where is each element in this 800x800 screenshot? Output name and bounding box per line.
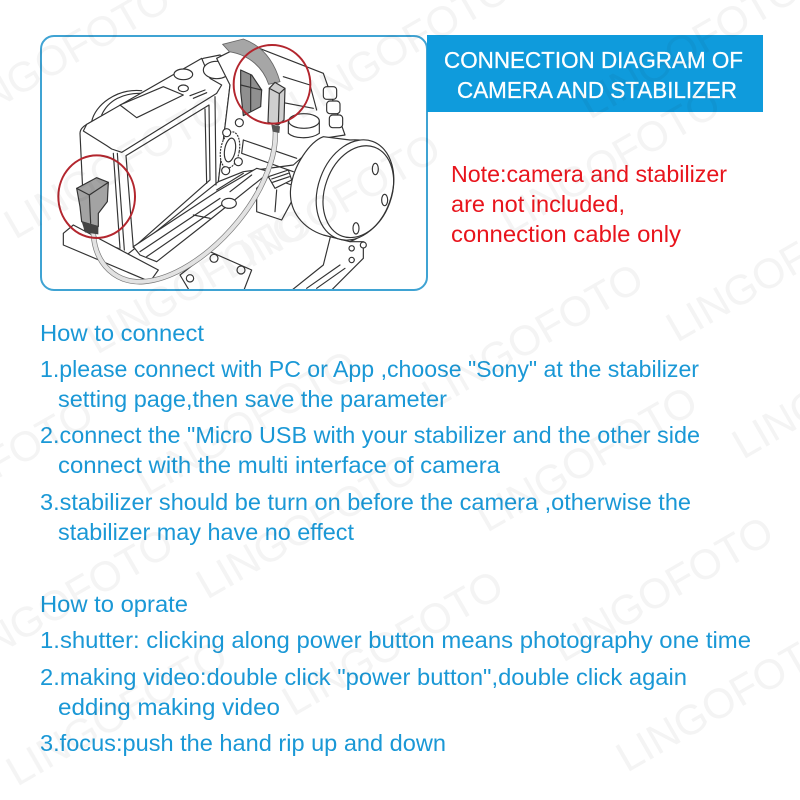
section: how to operate: 2.making video:double click "power button",double click again	[40, 664, 687, 690]
gimbal frame	[217, 43, 345, 182]
section: how to connect: 1.please connect with PC or App ,choose "Sony" at the stabilizer	[40, 356, 699, 382]
section: how to connect: How to connect	[40, 320, 205, 346]
note text: Note:camera and stabilizer	[451, 161, 727, 187]
watermark: LINGOFOTO repeated: LINGOFOTO	[128, 341, 365, 505]
watermark: LINGOFOTO repeated: LINGOFOTO	[544, 507, 781, 671]
watermark: LINGOFOTO repeated: LINGOFOTO	[0, 84, 233, 248]
watermark: LINGOFOTO repeated: LINGOFOTO	[414, 254, 651, 418]
illustration: line art of camera on stabilizer	[58, 39, 407, 292]
section: how to operate: How to oprate	[40, 591, 188, 617]
section: how to connect: setting page,then save the parameter	[58, 386, 447, 412]
grey strap	[223, 39, 280, 84]
note text: connection cable only	[451, 221, 682, 247]
watermark: LINGOFOTO repeated: LINGOFOTO	[274, 561, 511, 725]
note text: are not included,	[451, 191, 625, 217]
section: how to operate	[40, 591, 751, 756]
watermark: LINGOFOTO repeated: LINGOFOTO	[0, 631, 235, 795]
cable connector: micro USB	[268, 82, 285, 125]
cable connector: camera plug	[77, 178, 108, 227]
heading banner: CAMERA AND STABILIZER	[457, 77, 737, 103]
section: how to operate: edding making video	[58, 694, 280, 720]
section: how to connect	[40, 320, 700, 545]
heading banner	[427, 35, 763, 112]
section: how to connect: connect with the multi interface of camera	[58, 452, 500, 478]
watermark: LINGOFOTO repeated: LINGOFOTO	[188, 444, 425, 608]
section: how to operate: 1.shutter: clicking along power button means photography one time	[40, 627, 751, 653]
section: how to connect: 3.stabilizer should be turn on before the camera ,otherwise the	[40, 489, 691, 515]
lens and camera body	[92, 90, 142, 122]
red highlight circle: stabilizer port	[234, 45, 310, 124]
base plate and rails	[63, 225, 158, 282]
section: how to operate: 3.focus:push the hand rip up and down	[40, 730, 446, 756]
note text	[451, 161, 727, 247]
lower bracket	[257, 177, 293, 220]
multi interface block	[241, 70, 262, 116]
watermark: LINGOFOTO repeated: LINGOFOTO	[211, 124, 448, 288]
watermark: LINGOFOTO repeated: LINGOFOTO	[468, 377, 705, 541]
connection cable	[93, 130, 275, 282]
round motor	[290, 136, 360, 242]
control dial and buttons	[220, 131, 240, 168]
red highlight circle: camera port	[58, 155, 135, 238]
section: how to connect: 2.connect the "Micro USB with your stabilizer and the other side	[40, 422, 700, 448]
watermark: LINGOFOTO repeated: LINGOFOTO	[78, 199, 315, 363]
section: how to connect: stabilizer may have no effect	[58, 519, 355, 545]
panel: camera and stabilizer illustration	[41, 36, 427, 292]
watermark: LINGOFOTO repeated: LINGOFOTO	[491, 79, 728, 243]
heading banner: CONNECTION DIAGRAM OF	[444, 47, 743, 73]
